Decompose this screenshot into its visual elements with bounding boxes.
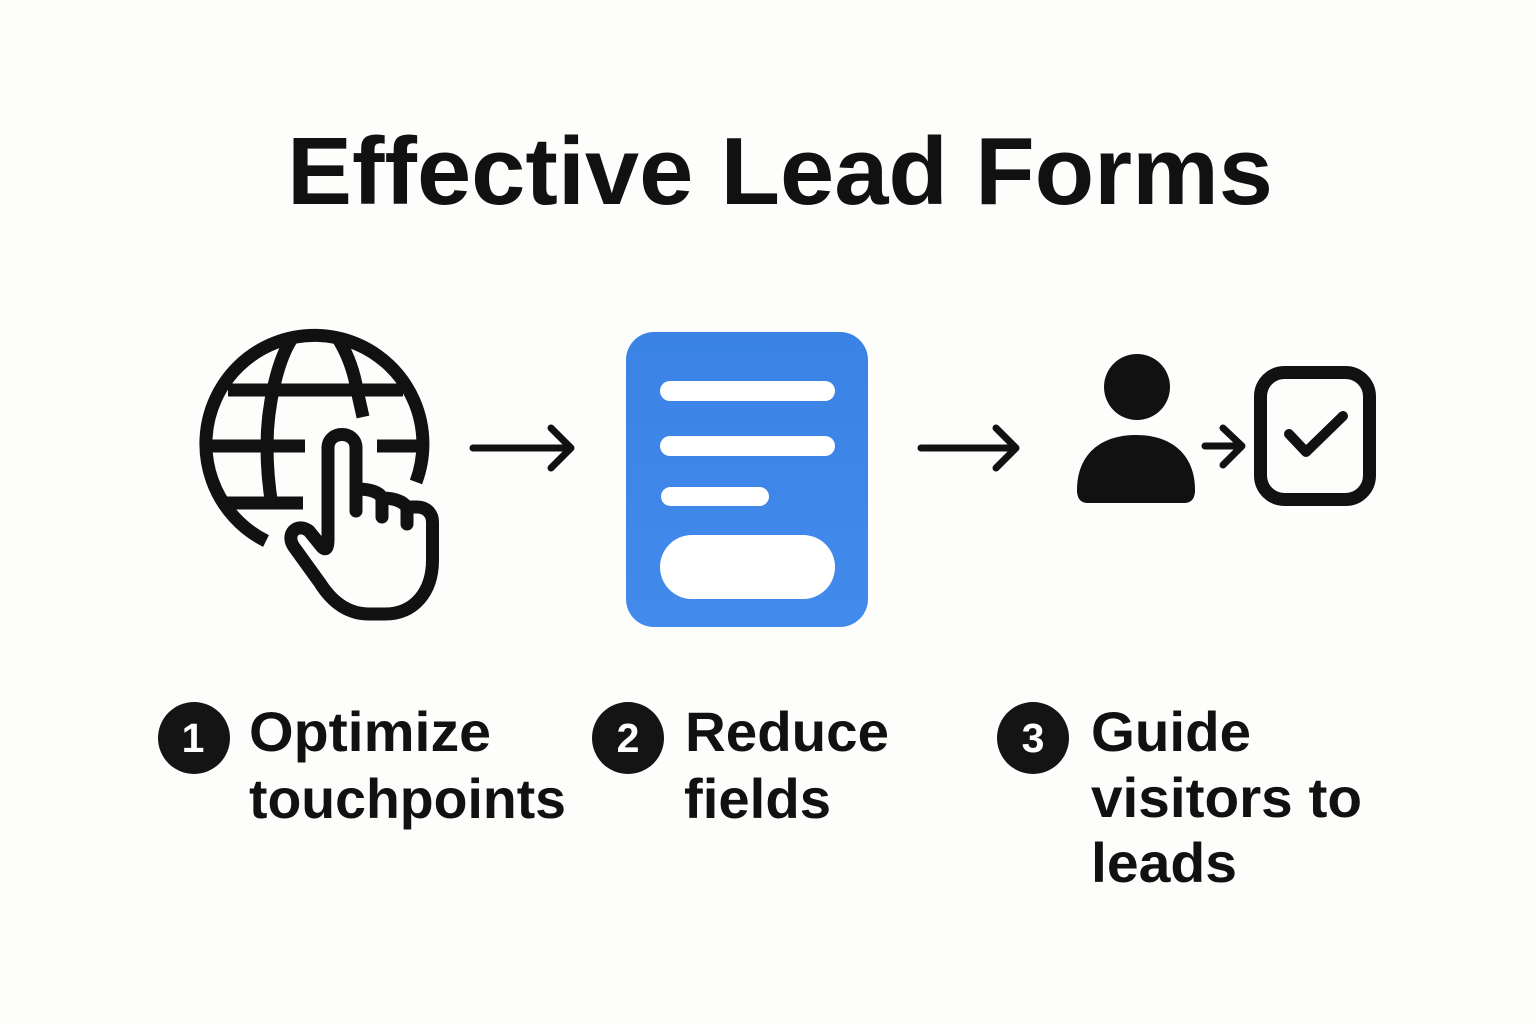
- hand outline: [291, 434, 432, 614]
- label: Reduce fields: fields: [684, 767, 831, 830]
- step 1: [158, 700, 566, 830]
- form field 1: [660, 381, 835, 401]
- icon: globe with pointing hand: [206, 335, 432, 614]
- person body: [1077, 435, 1195, 503]
- form card background: [626, 332, 868, 627]
- title: Effective Lead Forms: [287, 118, 1273, 225]
- arrow: step 2 to step 3: [921, 428, 1016, 468]
- label: Optimize touchpoints: touchpoints: [249, 767, 566, 830]
- form field 3: [661, 487, 769, 506]
- small arrow: [1205, 428, 1242, 465]
- globe outline: [206, 335, 423, 541]
- arrow: step 1 to step 2: [473, 428, 571, 468]
- checkbox: [1260, 372, 1370, 500]
- label: Reduce fields: Reduce: [685, 700, 889, 763]
- label: Optimize touchpoints: Optimize: [249, 700, 491, 763]
- number badge 2: [592, 702, 664, 774]
- icon: blue form card: [626, 332, 868, 627]
- check mark: [1289, 416, 1343, 452]
- globe grid lines: [209, 337, 423, 506]
- number badge 1: [158, 702, 230, 774]
- label: Guide visitors to leads: visitors to: [1091, 766, 1362, 829]
- person head: [1104, 354, 1170, 420]
- number badge 1: 1: [182, 715, 204, 761]
- step 3: [997, 700, 1378, 894]
- form submit button: [660, 535, 835, 599]
- number badge 3: 3: [1022, 715, 1044, 761]
- number badge 3: [997, 702, 1069, 774]
- step 2: [592, 700, 905, 830]
- number badge 2: 2: [617, 715, 639, 761]
- label: Guide visitors to leads: Guide: [1091, 700, 1251, 763]
- icon: person to checked box: [1077, 354, 1370, 503]
- label: Guide visitors to leads: leads: [1091, 831, 1237, 894]
- form field 2: [660, 436, 835, 456]
